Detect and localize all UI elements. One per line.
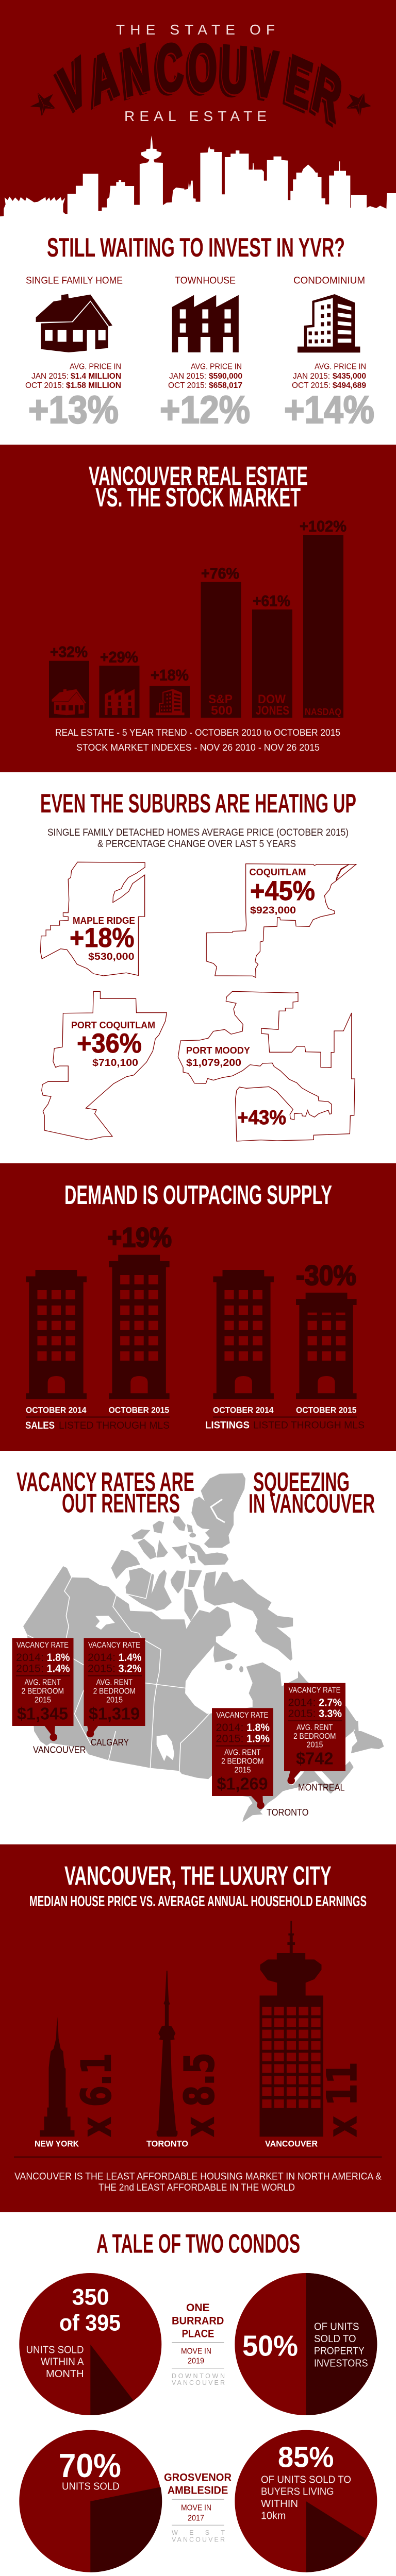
column: townhouse: AVG. PRICE IN [191,363,242,371]
label: One Burrard Place: ONE [186,2302,209,2314]
callout: Toronto vacancy [212,1708,273,1809]
subheading: suburbs [47,827,349,850]
bar chart: 5 year growth: NASDAQ [305,707,341,717]
heading: vacancy rates left: OUT RENTERS [62,1489,180,1519]
labels: listings: OCTOBER 2015 [296,1405,357,1415]
column: condominium: OCT 2015: [292,381,331,390]
heading: vacancy rates left: VACANCY RATES ARE [16,1467,194,1497]
bar chart: 5 year growth: DOW [258,692,286,706]
column: single family home: $1.58 MILLION [66,381,121,390]
city labels: TORONTO [267,1807,308,1818]
column: single family home: $1.4 MILLION [71,372,121,381]
city labels [33,1737,345,1818]
label: Grosvenor Ambleside: 2017 [188,2514,204,2522]
column: townhouse: $590,000 [209,372,242,381]
map: Port Coquitlam [42,991,167,1140]
column: single family home: +13% [28,388,119,431]
icon: Harbour Centre tower [260,1921,323,2137]
city labels: VANCOUVER [33,1744,86,1755]
pie: 50 percent investors: OF UNITS [314,2321,359,2333]
icon: house [36,294,112,352]
pie: 50 percent investors [235,2273,377,2415]
icon: right star [346,93,371,117]
map: Coquitlam [206,864,356,977]
callout: Toronto vacancy: 2015: [216,1733,243,1745]
callout: Toronto vacancy: 1.8% [246,1721,270,1734]
city names: NEW YORK [35,2139,79,2149]
pie: 70 percent sold [19,2430,162,2572]
panel: tale of two condos [0,2212,396,2576]
callout: Toronto vacancy: VACANCY RATE [217,1711,268,1720]
label: One Burrard Place [172,2302,225,2386]
pie: 50 percent investors: 50% [242,2330,298,2363]
callout: Montreal vacancy: 2015 [306,1741,323,1750]
bar chart: 5 year growth: +32% [50,644,88,661]
pie: 85 percent local buyers [235,2430,377,2572]
callout: Montreal vacancy: VACANCY RATE [289,1686,340,1694]
callout: Vancouver vacancy: $1,345 [17,1704,68,1723]
pie: 350 of 395 units: 350 [72,2284,109,2310]
label: Grosvenor Ambleside: WEST [172,2529,225,2536]
label: Grosvenor Ambleside [164,2472,232,2543]
labels: listings: OCTOBER 2014 [213,1405,274,1415]
labels: listings: LISTINGS [205,1420,250,1431]
bar chart: 5 year growth: JONES [256,704,289,718]
label: One Burrard Place: DOWNTOWN [172,2372,225,2380]
icon: listings tower October 2015 [296,1293,357,1399]
map: Port Moody: PORT MOODY [186,1045,251,1056]
stat: minus 30 percent: -30% [296,1260,356,1291]
column: townhouse: $658,017 [209,381,242,390]
map: Port Coquitlam: PORT COQUITLAM [71,1020,155,1030]
callout: Calgary vacancy: 1.4% [119,1651,142,1664]
bar chart: 5 year growth: +18% [151,667,189,684]
pie: 85 percent local buyers: 10km [261,2510,286,2521]
pie: 350 of 395 units [19,2273,161,2415]
chart notes: STOCK MARKET INDEXES - NOV 26 2010 - NOV 26 2015 [76,742,320,753]
column: condominium: $494,689 [333,381,366,390]
callout: Calgary vacancy: 2 BEDROOM [93,1687,136,1696]
column: condominium: +14% [284,388,374,431]
bar chart: 5 year growth: +76% [201,565,239,582]
note: least affordable: THE 2nd LEAST AFFORDABLE IN THE WORLD [98,2182,295,2193]
callout: Montreal vacancy: AVG. RENT [296,1723,333,1732]
pie: 50 percent investors: INVESTORS [314,2358,368,2369]
map: Coquitlam: $923,000 [250,905,296,916]
icon: small house [52,689,86,715]
stat: plus 19 percent: +19% [107,1223,172,1253]
title: real estate: REAL ESTATE [124,108,267,124]
labels: sales: OCTOBER 2014 [26,1405,87,1415]
title: Vancouver arched lettering: VANCOUVER [52,32,344,140]
callout: Toronto vacancy: 1.9% [246,1733,270,1745]
bar chart: 5 year growth: +29% [100,649,138,666]
icon: listings tower October 2014 [213,1270,274,1399]
label: One Burrard Place: PLACE [182,2328,214,2340]
heading: vs stock market [89,462,308,513]
icon: small condo [156,689,185,715]
column: condominium: JAN 2015: [293,372,330,381]
title: Vancouver arched lettering: VANCOUVER [55,29,348,137]
callout: Montreal vacancy: 2014: [288,1696,316,1708]
panel: vacancy rates [0,1451,396,1844]
column: condominium: CONDOMINIUM [293,275,365,286]
column: single family home: SINGLE FAMILY HOME [26,275,123,286]
panel: demand outpacing supply [0,1163,396,1451]
map: Port Moody: $1,079,200 [186,1058,241,1069]
panel: hero header [0,0,396,219]
panel: real estate vs stock market [0,445,396,772]
icon: sales tower October 2014 [26,1270,87,1399]
column: condominium [284,275,374,431]
callout: Calgary vacancy: 2015 [106,1696,123,1704]
callout: Vancouver vacancy: 2015: [16,1663,44,1675]
column: townhouse: TOWNHOUSE [175,275,236,286]
chart notes: REAL ESTATE - 5 YEAR TREND - OCTOBER 2010 to OCTOBER 2015 [55,727,340,738]
pie: 50 percent investors: PROPERTY [314,2345,365,2357]
callout: Calgary vacancy: 3.2% [119,1663,142,1675]
callout: Calgary vacancy: 2014: [88,1651,116,1664]
icon: left star [30,92,56,117]
callout: Vancouver vacancy [12,1638,73,1741]
pie: 85 percent local buyers: BUYERS LIVING [261,2486,334,2498]
panel: suburbs heating up [0,772,396,1163]
map: Port Coquitlam: $710,100 [92,1058,138,1069]
multiple: New York: x 6.1 [74,2053,120,2137]
subheading: suburbs: SINGLE FAMILY DETACHED HOMES AVERAGE PRICE (OCTOBER 2015) [47,827,349,838]
icon: sales tower October 2015 [109,1255,170,1399]
callout: Toronto vacancy: 2 BEDROOM [221,1757,264,1766]
callout: Vancouver vacancy: VACANCY RATE [16,1641,69,1650]
bar chart: 5 year growth: +61% [253,593,290,610]
label: Grosvenor Ambleside: GROSVENOR [164,2472,232,2484]
callout: Montreal vacancy [284,1683,345,1784]
column: townhouse: +12% [160,388,250,431]
map: Maple Ridge: $530,000 [88,952,134,962]
map: Canada [23,1473,384,1822]
labels: sales: LISTED THROUGH MLS [59,1420,170,1431]
icon: Empire State Building [40,2017,74,2137]
pie: 350 of 395 units: WITHIN A [41,2357,84,2368]
column: single family home [25,275,123,431]
column: condominium: AVG. PRICE IN [315,363,366,371]
column: townhouse: OCT 2015: [168,381,207,390]
map: Coquitlam: COQUITLAM [250,867,306,877]
callout: Toronto vacancy: 2015 [234,1766,251,1774]
callout: Vancouver vacancy: AVG. RENT [25,1679,61,1687]
label: One Burrard Place: 2019 [188,2357,204,2366]
panel: luxury city [0,1844,396,2212]
pie: 50 percent investors: SOLD TO [314,2333,356,2345]
city names: VANCOUVER [265,2139,318,2149]
callout: Calgary vacancy [84,1638,145,1737]
callout: Montreal vacancy: 2015: [288,1707,316,1720]
title: Vancouver arched lettering: VANCOUVER [55,29,348,137]
pie: 85 percent local buyers: 85% [278,2441,334,2473]
heading: vacancy rates left [16,1467,194,1519]
callout: Calgary vacancy: $1,319 [89,1704,140,1723]
label: Grosvenor Ambleside: VANCOUVER [172,2536,225,2543]
callout: Calgary vacancy: VACANCY RATE [88,1641,140,1650]
city names: TORONTO [146,2139,188,2149]
callout: Montreal vacancy: 2.7% [319,1696,342,1708]
multiple: Vancouver: x 11 [320,2062,366,2137]
bar chart: 5 year growth: S&P [208,692,233,706]
column: condominium: $435,000 [333,372,366,381]
map: Port Moody: +43% [237,1107,286,1129]
pie: 350 of 395 units: of 395 [59,2310,121,2335]
label: Grosvenor Ambleside: MOVE IN [181,2503,211,2512]
pie: 70 percent sold: UNITS SOLD [62,2481,120,2493]
callout: Calgary vacancy: 2015: [88,1663,116,1675]
label: One Burrard Place: BURRARD [172,2315,224,2327]
callout: Montreal vacancy: $742 [296,1749,333,1768]
labels: listings [205,1405,365,1431]
callout: Toronto vacancy: $1,269 [217,1774,268,1793]
multiple: Toronto: x 8.5 [177,2053,223,2137]
labels: sales [25,1405,170,1431]
labels: sales: OCTOBER 2015 [109,1405,169,1415]
pie: 85 percent local buyers: OF UNITS SOLD TO [261,2474,351,2485]
callout: Vancouver vacancy: 2015 [35,1696,51,1704]
bar chart: 5 year growth [49,518,346,718]
callout: Vancouver vacancy: 1.4% [47,1663,70,1675]
labels: listings: LISTED THROUGH MLS [253,1420,365,1431]
callout: Toronto vacancy: 2014: [216,1721,243,1734]
panel: still waiting to invest [0,219,396,445]
pie: 85 percent local buyers: WITHIN [261,2498,298,2510]
bar chart: 5 year growth: +102% [300,518,346,535]
column: townhouse: JAN 2015: [169,372,206,381]
bar chart: 5 year growth: 500 [211,704,233,718]
column: townhouse [160,275,250,431]
icon: small townhouse [105,689,135,715]
label: One Burrard Place: MOVE IN [181,2347,211,2355]
map: Maple Ridge: MAPLE RIDGE [73,915,135,926]
callout: Vancouver vacancy: 2014: [16,1651,44,1664]
callout: Montreal vacancy: 3.3% [319,1707,342,1720]
map: Maple Ridge: +18% [70,923,134,953]
callout: Vancouver vacancy: 2 BEDROOM [22,1687,64,1696]
map: Maple Ridge [40,862,145,976]
subheading: suburbs: & PERCENTAGE CHANGE OVER LAST 5 YEARS [97,839,296,850]
pie: 70 percent sold: 70% [59,2447,121,2484]
column: single family home: AVG. PRICE IN [70,363,121,371]
title: the state of: THE STATE OF [116,22,275,38]
label: Grosvenor Ambleside: AMBLESIDE [168,2485,228,2497]
callout: Montreal vacancy: 2 BEDROOM [293,1732,336,1741]
city labels: MONTREAL [298,1782,345,1792]
icon: townhouse [172,295,239,352]
heading: vacancy rates right [249,1467,375,1519]
map: Coquitlam: +45% [250,876,315,906]
skyline silhouette [0,135,396,219]
pie: 350 of 395 units: MONTH [46,2368,84,2380]
chart notes [55,727,340,753]
map: Port Coquitlam: +36% [77,1028,142,1059]
icon: CN Tower [157,1971,177,2137]
icon: condo tower [298,294,360,352]
city names [35,2139,318,2149]
map: Port Moody [178,991,355,1141]
label: One Burrard Place: VANCOUVER [172,2379,225,2386]
callout: Vancouver vacancy: 1.8% [47,1651,70,1664]
column: single family home: OCT 2015: [25,381,64,390]
callout: Calgary vacancy: AVG. RENT [96,1679,133,1687]
note: least affordable [14,2172,382,2193]
city labels: CALGARY [91,1737,129,1748]
pie: 350 of 395 units: UNITS SOLD [26,2344,84,2355]
labels: sales: SALES [25,1420,55,1431]
column: single family home: JAN 2015: [31,372,69,381]
callout: Toronto vacancy: AVG. RENT [224,1749,261,1757]
